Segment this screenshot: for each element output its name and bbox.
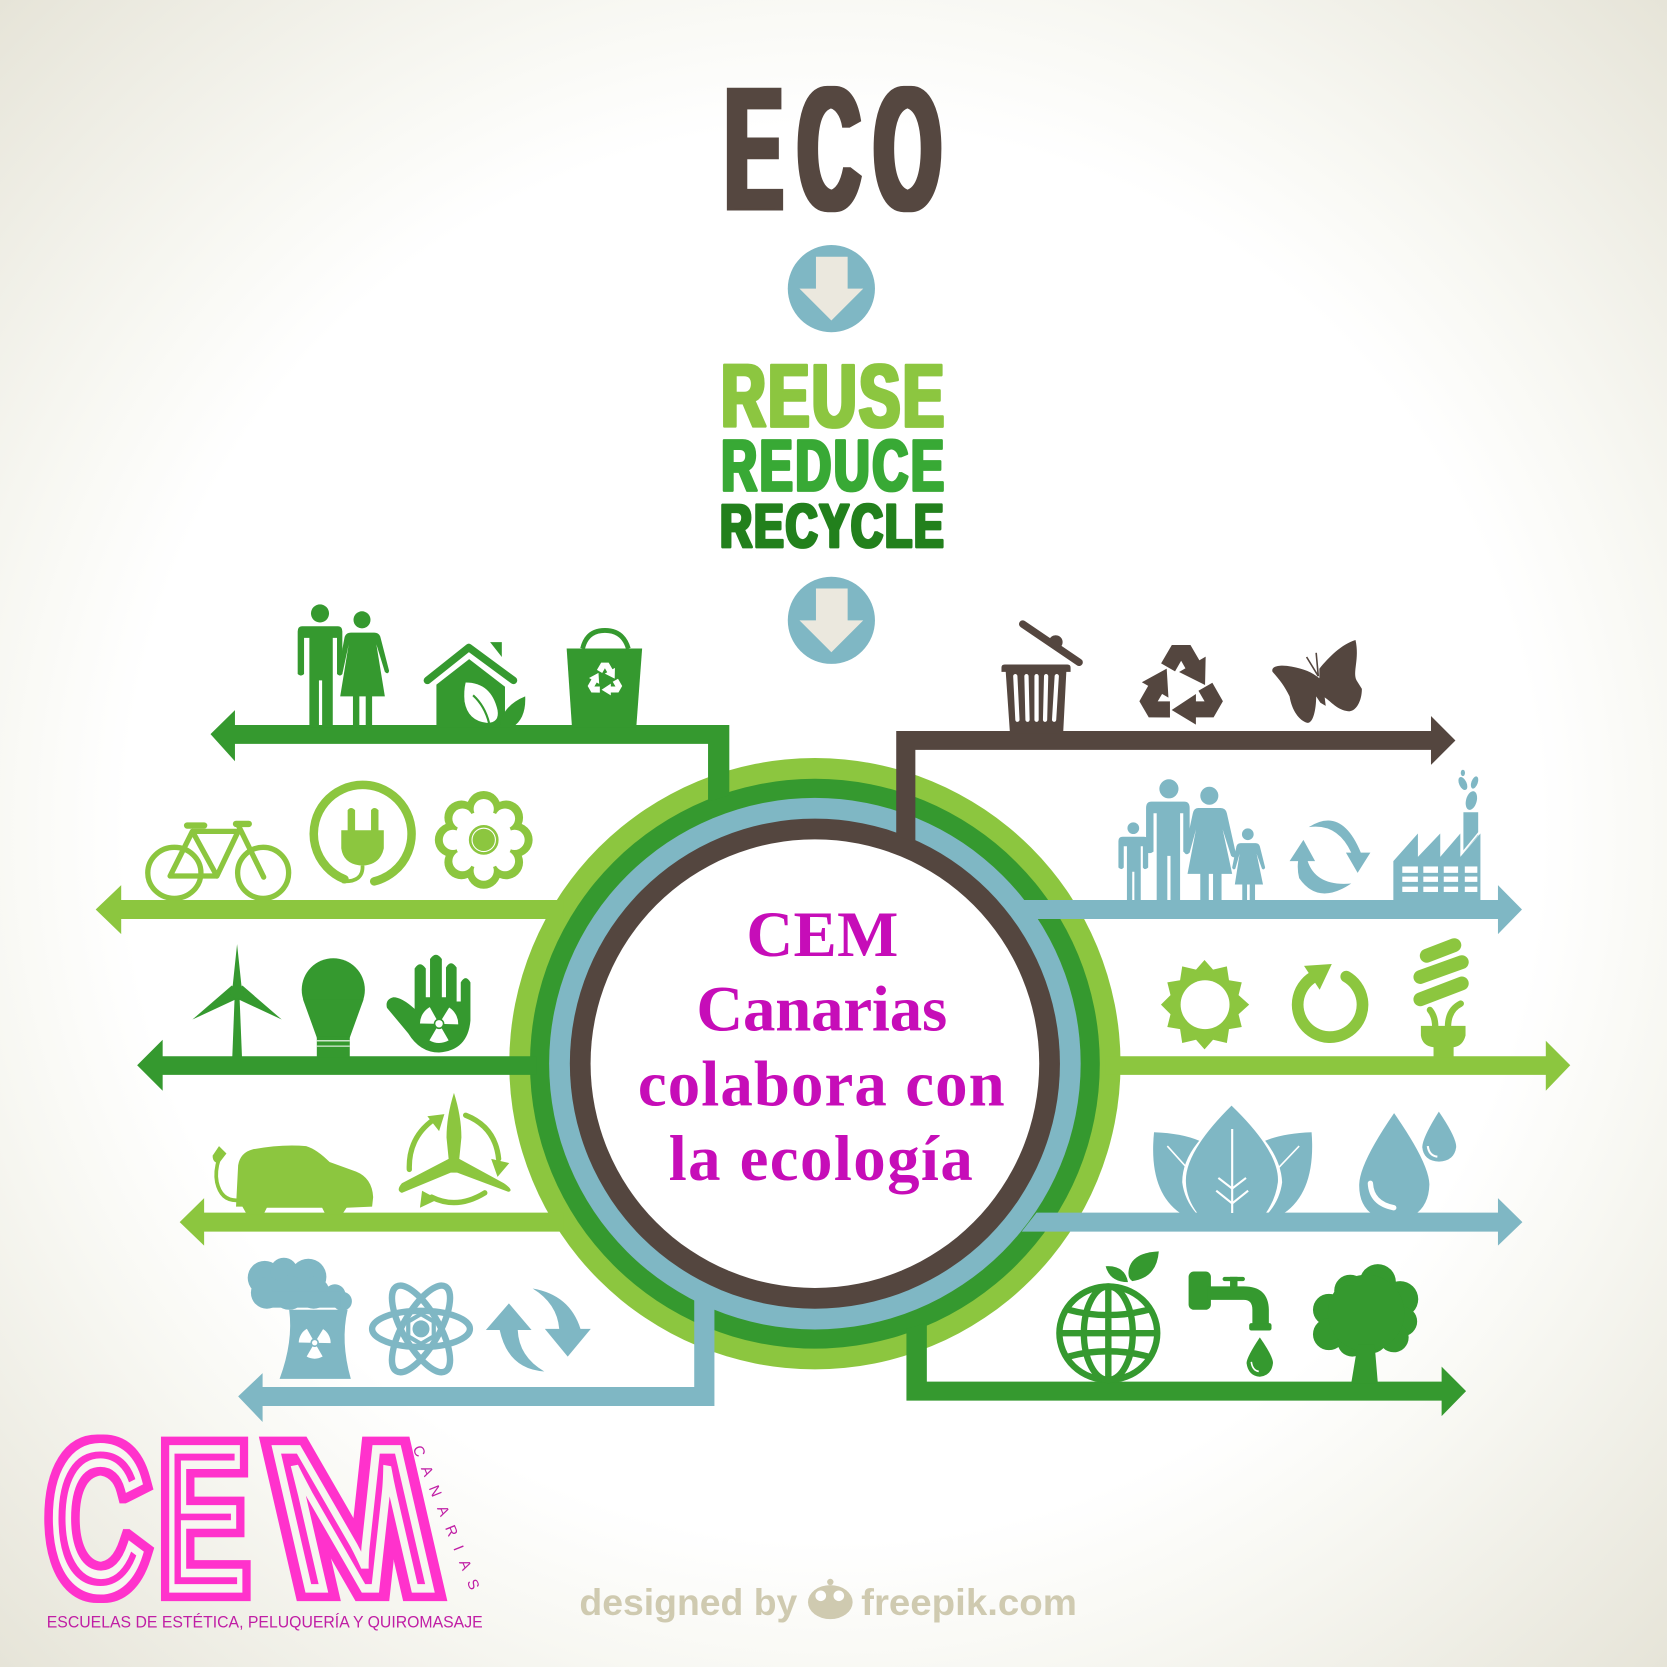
icon: eco house: [427, 642, 525, 727]
logo: CEM Canarias: E: [162, 1406, 245, 1632]
logo: CEM Canarias: M: [251, 1406, 455, 1632]
logo: CEM Canarias: M: [251, 1406, 455, 1632]
logo: CEM Canarias: C: [49, 1407, 145, 1632]
arrow: right blue 1: [1023, 885, 1522, 934]
icon: nuclear cooling tower: [248, 1258, 352, 1379]
icon: trash can: [1001, 624, 1079, 734]
icon: globe with leaves: [1059, 1251, 1159, 1380]
icon: leaves: [1153, 1106, 1312, 1214]
icon: factory: [1393, 770, 1480, 902]
heading: reuse reduce recycle: RECYCLE: [720, 492, 946, 561]
heading: reuse reduce recycle: REDUCE: [721, 427, 947, 507]
icon: electric car: [213, 1145, 373, 1214]
icon: hand with radiation: [387, 955, 470, 1053]
arrow: left dark green: [137, 1040, 537, 1091]
central message: CEM: [746, 899, 898, 971]
heading: reuse reduce recycle: [720, 345, 947, 561]
central message: colabora con: [638, 1049, 1005, 1121]
icon: swap arrows: [486, 1289, 591, 1371]
credit: designed by freepik.com: [579, 1579, 1077, 1623]
logo: CEM Canarias: [49, 1406, 455, 1632]
logo: CEM Canarias: C: [49, 1407, 145, 1632]
icon: bicycle: [148, 824, 289, 898]
central message: [638, 899, 1005, 1195]
arrow: left light green 2: [180, 1198, 563, 1246]
icon: atom: [372, 1278, 470, 1380]
icon: down arrow 1: [788, 245, 875, 332]
icon: tree: [1313, 1264, 1418, 1383]
icon: recycling symbol: [1133, 646, 1227, 729]
arrow: left light green 1: [96, 885, 563, 934]
icon: cycle arrows: [1290, 820, 1370, 893]
credit: designed by freepik.com: designed by: [579, 1581, 798, 1623]
icon: CFL bulb: [1420, 945, 1466, 1058]
icon: turbine with cycle arrows: [399, 1093, 511, 1208]
arrow: right blue 2: [1022, 1198, 1522, 1246]
icon: light bulb: [302, 958, 365, 1058]
title: ECO: ECO: [725, 52, 941, 248]
arrow: top right brown: [896, 716, 1455, 842]
arrow: top left dark green: [211, 710, 729, 802]
arrow: bottom right dark green: [906, 1323, 1466, 1416]
arrow: right light green: [1106, 1041, 1570, 1091]
central message: Canarias: [696, 974, 947, 1046]
icon: plug in circle: [314, 785, 412, 881]
icon: flower: [435, 791, 533, 889]
icon: circular arrow: [1298, 964, 1363, 1037]
central message: la ecología: [669, 1123, 973, 1195]
icon: water tap: [1189, 1272, 1273, 1377]
icon: family: [1118, 779, 1265, 902]
logo tagline: ESCUELAS DE ESTÉTICA, PELUQUERÍA Y QUIROMASAJE: [47, 1613, 483, 1632]
credit: designed by freepik.com: freepik.com: [861, 1581, 1077, 1623]
icon: recycling bucket: [567, 630, 642, 727]
icon: sun: [1161, 960, 1249, 1049]
logo: CEM Canarias: E: [162, 1406, 245, 1632]
icon: couple: [298, 604, 389, 727]
heading: reuse reduce recycle: REUSE: [721, 345, 947, 445]
icon: wind turbine: [192, 944, 282, 1057]
logo side text: CANARIAS: CANARIAS: [409, 1443, 486, 1603]
icon: down arrow 2: [788, 577, 875, 664]
icon: water drops: [1359, 1112, 1456, 1215]
arrow: bottom left blue: [238, 1299, 714, 1422]
central concentric rings: [509, 758, 1121, 1369]
icon: butterfly: [1272, 640, 1362, 723]
